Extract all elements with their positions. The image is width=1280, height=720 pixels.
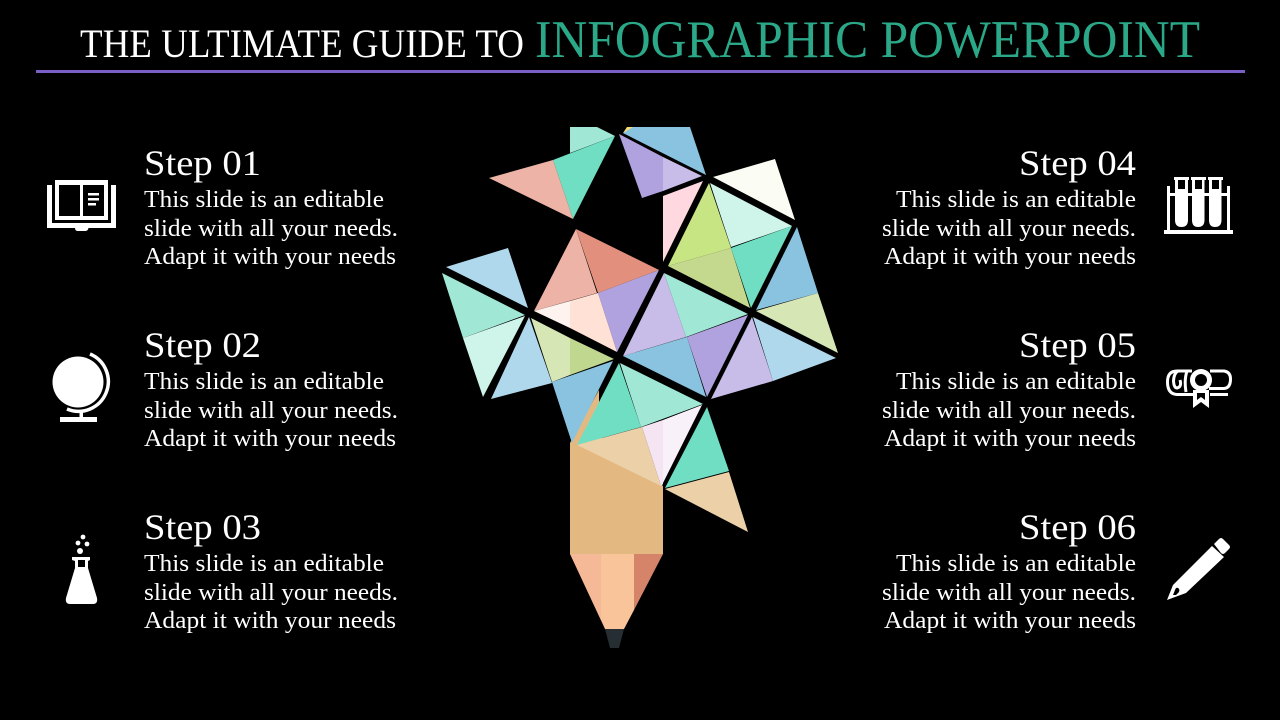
panel: step 06 text <box>882 507 1136 634</box>
triangles: right cluster <box>623 159 838 399</box>
pencil tip <box>570 554 663 648</box>
icon: flask with bubbles <box>66 535 97 604</box>
panel: step 02 text: slide with all your needs. <box>144 398 398 424</box>
panel: step 02 text <box>144 325 398 452</box>
panel: step 06 text: slide with all your needs. <box>882 580 1136 606</box>
panel: step 02 text: This slide is an editable <box>144 369 384 395</box>
chart: geometric pencil illustration <box>442 127 838 648</box>
icon: open book <box>47 180 116 231</box>
panel: step 03 text: Step 03 <box>144 507 261 547</box>
panel: step 01 text: This slide is an editable <box>144 187 384 213</box>
triangles: top cluster <box>489 127 706 219</box>
panel: step 04 text: Step 04 <box>1019 143 1136 183</box>
panel: step 05 text: Adapt it with your needs <box>884 426 1136 452</box>
icon: diploma scroll with seal <box>1168 369 1230 408</box>
panel: step 03 text: Adapt it with your needs <box>144 608 396 634</box>
panel: step 04 text: Adapt it with your needs <box>884 244 1136 270</box>
triangles: lower cluster <box>577 363 748 532</box>
triangles: left cluster <box>442 248 614 443</box>
panel: step 05 text: slide with all your needs. <box>882 398 1136 424</box>
panel: step 05 text <box>882 325 1136 452</box>
panel: step 05 text: This slide is an editable <box>896 369 1136 395</box>
title: INFOGRAPHIC POWERPOINT <box>535 11 1200 69</box>
panel: step 05 text: Step 05 <box>1019 325 1136 365</box>
panel: step 03 text: This slide is an editable <box>144 551 384 577</box>
panel: step 03 text: slide with all your needs. <box>144 580 398 606</box>
panel: step 01 text <box>144 143 398 270</box>
title: THE ULTIMATE GUIDE TO <box>80 21 524 66</box>
panel: step 06 text: Adapt it with your needs <box>884 608 1136 634</box>
panel: step 01 text: Step 01 <box>144 143 261 183</box>
triangles: centre cluster <box>534 229 659 352</box>
panel: step 01 text: Adapt it with your needs <box>144 244 396 270</box>
panel: step 06 text: This slide is an editable <box>896 551 1136 577</box>
icon: pencil <box>1167 538 1230 600</box>
pencil body <box>570 390 663 554</box>
panel: step 02 text: Step 02 <box>144 325 261 365</box>
icon: globe <box>52 354 108 422</box>
panel: step 04 text: slide with all your needs. <box>882 216 1136 242</box>
panel: step 04 text: This slide is an editable <box>896 187 1136 213</box>
title <box>80 11 1200 69</box>
panel: step 04 text <box>882 143 1136 270</box>
panel: step 02 text: Adapt it with your needs <box>144 426 396 452</box>
panel: step 06 text: Step 06 <box>1019 507 1136 547</box>
panel: step 01 text: slide with all your needs. <box>144 216 398 242</box>
panel: step 03 text <box>144 507 398 634</box>
icon: test tubes <box>1164 177 1233 234</box>
